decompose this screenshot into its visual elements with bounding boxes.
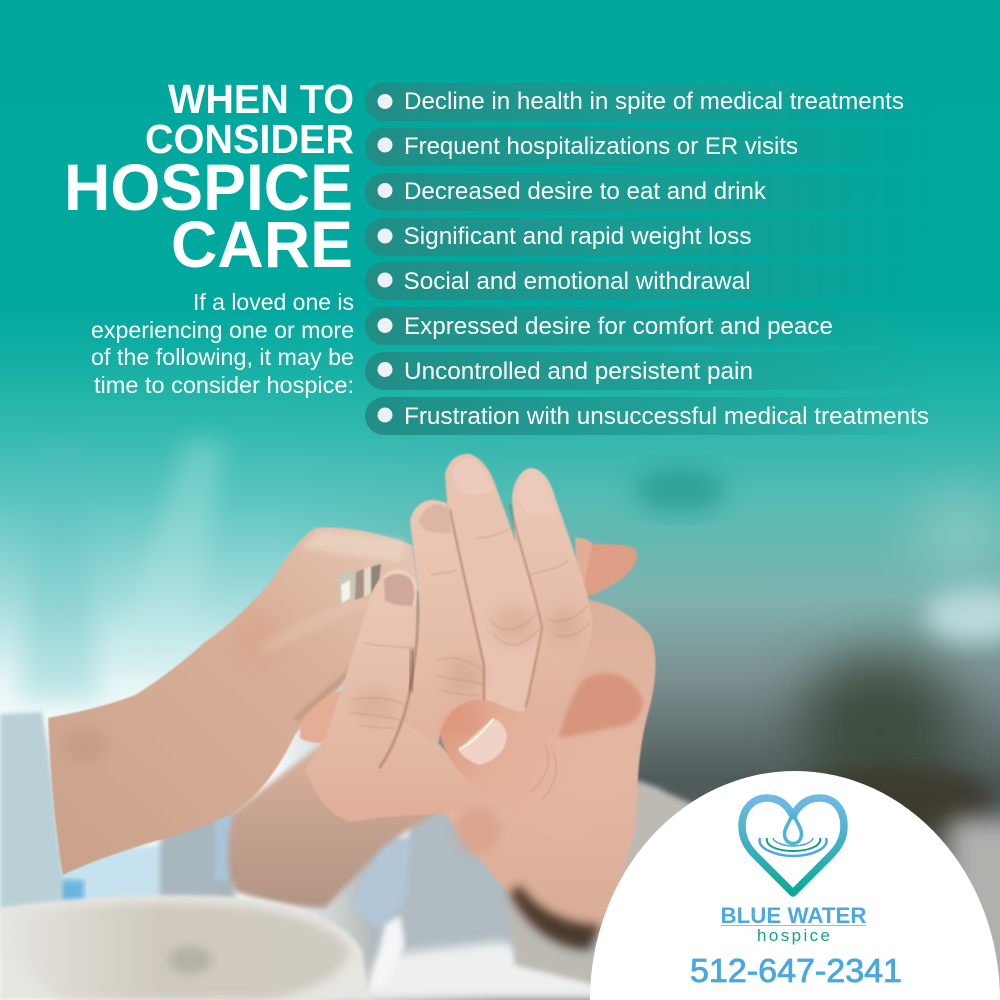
list item 7 xyxy=(365,352,935,390)
list item 6 xyxy=(365,307,935,345)
photo: clasped hands xyxy=(0,454,695,1000)
cup interior xyxy=(0,903,350,1000)
phone number: 512-647-2341 xyxy=(690,952,902,989)
title: CARE xyxy=(171,208,353,281)
list item 5: Social and emotional withdrawal xyxy=(404,268,750,295)
list item 2: Frequent hospitalizations or ER visits xyxy=(404,133,798,160)
intro paragraph: of the following, it may be xyxy=(91,344,354,370)
logo wordmark: hospice: hospice xyxy=(757,926,830,945)
intro paragraph: If a loved one is xyxy=(193,289,354,315)
list item 5 xyxy=(365,262,935,300)
list item 4 xyxy=(365,218,935,256)
intro paragraph: experiencing one or more xyxy=(91,317,354,343)
finger separation shadows xyxy=(380,505,542,767)
intro paragraph: time to consider hospice: xyxy=(94,372,354,398)
right thumb xyxy=(440,700,512,792)
finger D xyxy=(511,467,592,734)
list item 3 xyxy=(365,173,935,211)
nails xyxy=(384,458,555,606)
icon: heart outline xyxy=(742,798,844,893)
finger B xyxy=(404,498,484,744)
right hand: palm and wrist xyxy=(443,598,656,940)
list item 7: Uncontrolled and persistent pain xyxy=(404,358,753,385)
logo wordmark: BLUE WATER: BLUE WATER xyxy=(720,903,867,928)
panel: logo dome xyxy=(590,771,1000,1000)
cup in the foreground xyxy=(0,895,370,1000)
right cuff shadow band xyxy=(510,885,600,950)
list item 1: Decline in health in spite of medical treatments xyxy=(404,88,904,115)
list item 2 xyxy=(365,128,935,166)
title: WHEN TO xyxy=(168,76,354,122)
list item 8: Frustration with unsuccessful medical treatments xyxy=(404,403,929,430)
knuckle shading xyxy=(353,605,581,721)
thumbnail xyxy=(458,718,507,765)
lower-right finger xyxy=(558,673,643,738)
sleeve: right cuff xyxy=(505,780,695,985)
list item 6: Expressed desire for comfort and peace xyxy=(404,313,833,340)
fingers behind: right side xyxy=(575,538,637,597)
title xyxy=(64,76,354,281)
title: CONSIDER xyxy=(145,116,354,162)
finger A and central palm xyxy=(306,578,454,822)
logo: heart with water drop xyxy=(742,798,844,893)
list item 8 xyxy=(365,397,935,435)
list item 3: Decreased desire to eat and drink xyxy=(404,178,767,205)
ring xyxy=(338,564,381,605)
icon: water drop xyxy=(784,812,802,844)
knuckle and crease detail xyxy=(350,526,590,728)
left hand shading xyxy=(63,530,405,763)
intro paragraph xyxy=(91,289,354,398)
sleeve: left patient cuff xyxy=(0,712,62,910)
forearm under the central hand xyxy=(228,745,440,908)
right hand lower-left pink heel xyxy=(456,806,500,854)
icon: ripples xyxy=(760,838,827,856)
title: HOSPICE xyxy=(64,151,353,224)
left hand with ring xyxy=(48,527,418,875)
list item 1 xyxy=(365,83,935,121)
list of warning signs xyxy=(365,83,935,435)
thumb creases xyxy=(530,745,556,800)
background: teal gradient and blurred photo backdrop xyxy=(0,326,1000,1000)
list item 4: Significant and rapid weight loss xyxy=(404,223,752,250)
finger C xyxy=(445,454,543,712)
small fingers behind the central hand xyxy=(300,690,345,743)
